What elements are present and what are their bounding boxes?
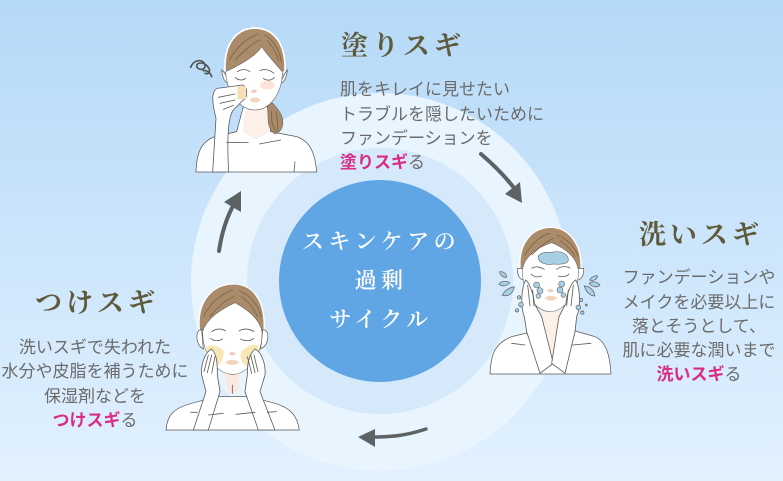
illustration: applying foundation: [191, 28, 317, 172]
center circle: [279, 180, 481, 382]
center title line 1: スキンケアの: [302, 229, 460, 254]
heading: つけスギ: つけスギ: [35, 288, 159, 318]
text block: 洗いスギ: 肌に必要な潤いまで: [622, 341, 776, 360]
icon: water drops: [499, 272, 600, 314]
text block: つけスギ: 洗いスギで失われた: [19, 338, 171, 357]
text block: 洗いスギ: る: [724, 365, 742, 384]
text block: つけスギ: る: [120, 411, 138, 430]
text block: 塗りスギ: 肌をキレイに見せたい: [340, 80, 510, 99]
text block: つけスギ: つけスギ: [52, 411, 120, 430]
arrow: washing to moisturizing: [358, 429, 426, 447]
text block: 塗りスギ: トラブルを隠したいために: [340, 104, 544, 124]
heading: 塗りスギ: 塗りスギ: [341, 31, 465, 61]
text block: 塗りスギ: 塗りスギ: [340, 153, 408, 172]
text block: 塗りスギ: る: [408, 153, 425, 172]
illustration: over-applying skincare: [166, 284, 299, 430]
icon: worry scribble: [191, 61, 212, 77]
center title line 2: 過剰: [354, 268, 408, 293]
text block: つけスギ: 水分や皮脂を補うために: [2, 362, 188, 381]
arrow: moisturizing to applying: [219, 191, 241, 251]
text block: 塗りスギ: ファンデーションを: [340, 128, 493, 148]
text block: 洗いスギ: 洗いスギ: [656, 365, 724, 384]
heading: 洗いスギ: 洗いスギ: [639, 220, 763, 250]
text block: つけスギ: 保湿剤などを: [44, 387, 146, 406]
illustration: over-washing: [490, 227, 611, 374]
cycle rings: [191, 93, 569, 471]
text block: 洗いスギ: 落とそうとして、: [632, 317, 766, 336]
center title line 3: サイクル: [329, 307, 433, 332]
text block: 洗いスギ: メイクを必要以上に: [623, 293, 775, 312]
text block: 洗いスギ: ファンデーションや: [623, 268, 775, 287]
arrow: applying to washing: [481, 154, 522, 203]
